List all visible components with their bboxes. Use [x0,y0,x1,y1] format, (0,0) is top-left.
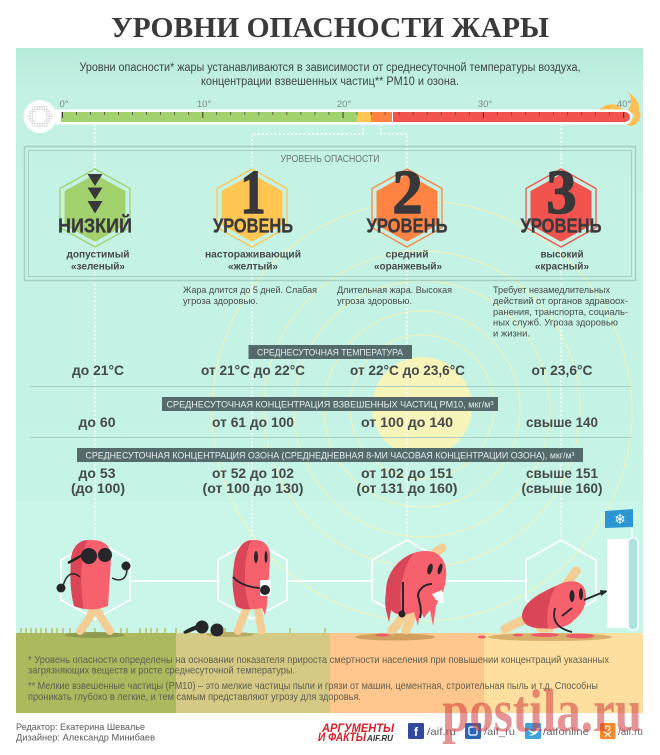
illustration: popsicle with coffee [233,540,271,631]
level: low green: допустимый [66,248,130,260]
level: low green [58,169,132,272]
level: low green: НИЗКИЙ [58,214,132,238]
row: ozone concentration [71,448,602,496]
social links: /aif.ru [618,726,643,738]
illustration: fallen sunglasses [183,620,224,636]
icon: fridge with flag [605,509,638,630]
level 3 red: 3 [546,159,576,227]
row: PM10 concentration: до 60 [78,414,116,430]
row: ozone concentration: (до 100) [71,480,125,496]
row: average temperature [72,345,592,378]
icon: fridge with flag: ❄ [614,512,626,528]
scale labels: 0° [59,99,69,110]
heading: danger level: УРОВЕНЬ ОПАСНОСТИ [280,154,380,165]
logo: Argumenty i Fakty: И ФАКТЫ [318,732,366,744]
description: level 3: ранения, транспорта, социаль- [493,307,628,318]
description: level 1 [183,285,317,307]
description: level 3: действий от органов здравоох- [493,296,628,307]
row: ozone concentration: свыше 151 [526,465,598,481]
social links [408,723,643,739]
white hexagons and connecting line [61,540,596,619]
social links: /aif_ru [484,726,515,738]
footnotes: проникать глубоко в легкие, и тем самым представляют угрозу для здоровья. [28,691,361,703]
level 2 orange [366,159,448,272]
illustration: melting popsicle [385,548,446,630]
row: PM10 concentration: СРЕДНЕСУТОЧНАЯ КОНЦЕНТРАЦИЯ ВЗВЕШЕННЫХ ЧАСТИЦ PM10, мкг/м³ [166,400,494,410]
ground shadows [65,632,612,641]
level 1 yellow: 1 [240,159,266,227]
logo: Argumenty i Fakty: АРГУМЕНТЫ [321,723,394,735]
description: level 3: и жизни. [493,328,530,340]
row: ozone concentration: до 53 [78,465,116,481]
scale labels [59,99,631,110]
row: average temperature: СРЕДНЕСУТОЧНАЯ ТЕМПЕРАТУРА [257,348,404,358]
illustration: fully melted popsicle [505,571,608,632]
description: level 3 [493,285,628,340]
level 2 orange: УРОВЕНЬ [366,216,448,238]
icon: thermometer flames [598,92,641,126]
intro text: Уровни опасности* жары устанавливаются в зависимости от среднесуточной температуры воздуха, [80,62,580,74]
description: level 2: угроза здоровью. [337,296,412,307]
row: average temperature: до 21°С [72,362,124,378]
level: low green: «зеленый» [71,260,125,272]
scale labels: 20° [337,99,351,110]
sun with concentric rings [212,201,632,621]
level 2 orange: средний [386,248,428,260]
footnotes: ** Мелкие взвешенные частицы (PM10) – это мелкие частицы пыли и грязи от машин, цементная, строительная пыль и т.д. Способны [28,680,598,692]
scale labels: 40° [617,99,631,110]
level 1 yellow: «желтый» [228,260,278,272]
row: average temperature: от 22°С до 23,6°С [350,362,465,378]
thermometer [24,99,632,133]
row: PM10 concentration: от 61 до 100 [212,414,294,430]
credits: Редактор: Екатерина Шевалье [16,722,145,733]
row: ozone concentration: (свыше 160) [522,480,602,496]
row: PM10 concentration: свыше 140 [526,414,598,430]
level 1 yellow: УРОВЕНЬ [213,216,293,238]
icon: down triangles [88,174,102,214]
row: average temperature: от 21°С до 22°С [201,362,305,378]
illustration: popsicle with sunglasses [56,540,130,631]
description: level 1: угроза здоровью. [183,296,258,307]
social links: /aifonline [543,726,589,738]
footnotes: * Уровень опасности определены на основании показателя прироста смертности населения при повышении концентраций указанных [28,655,609,666]
title: УРОВНИ ОПАСНОСТИ ЖАРЫ [111,12,549,44]
level 1 yellow [205,159,301,272]
footnotes [28,655,609,703]
level 1 yellow: настораживающий [205,248,301,260]
level 2 orange: «оранжевый» [374,260,442,272]
row: ozone concentration: СРЕДНЕСУТОЧНАЯ КОНЦЕНТРАЦИЯ ОЗОНА (СРЕДНЕДНЕВНАЯ 8-МИ ЧАСОВАЯ КОНЦЕНТРАЦИИ ОЗОНА), мкг/м³ [86,450,574,462]
logo: Argumenty i Fakty [318,723,394,744]
level 3 red [520,159,602,272]
row: PM10 concentration: от 100 до 140 [361,414,453,430]
row: PM10 concentration [78,397,598,430]
dotted connector lines [95,124,561,537]
credits: Дизайнер: Александр Минибаев [16,732,155,744]
scale labels: 10° [197,99,211,110]
panel: teal background [16,48,643,634]
description: level 2 [337,285,452,307]
social links: /aif.ru [427,726,456,738]
divider [30,436,631,438]
row: ozone concentration: от 52 до 102 [212,465,294,481]
grass [21,628,325,633]
scale labels: 30° [478,99,492,110]
footnotes: загрязняющих веществ и росте среднесуточной температуры. [28,666,295,676]
red puddles [375,633,594,638]
row: ozone concentration: (от 100 до 130) [202,480,304,496]
row: average temperature: от 23,6°С [532,362,592,378]
description: level 3: ных служб. Угроза здоровью [493,318,618,328]
social links: f [414,725,419,739]
row: ozone concentration: (от 131 до 160) [356,480,458,496]
level 3 red: УРОВЕНЬ [520,216,602,238]
credits [16,722,155,744]
panel: danger level frame [24,146,636,280]
ground bands [16,633,643,713]
intro text [80,62,580,88]
level 3 red: «красный» [535,260,589,272]
intro text: концентрации взвешенных частиц** PM10 и озона. [201,76,459,88]
description: level 3: Требует незамедлительных [493,285,610,296]
logo: Argumenty i Fakty: AIF.RU [366,733,394,743]
description: level 1: Жара длится до 5 дней. Слабая [183,285,317,296]
row: ozone concentration: от 102 до 151 [361,465,453,481]
level 3 red: высокий [540,248,584,260]
level 2 orange: 2 [392,159,422,227]
description: level 2: Длительная жара. Высокая [337,285,452,296]
divider [30,386,631,388]
